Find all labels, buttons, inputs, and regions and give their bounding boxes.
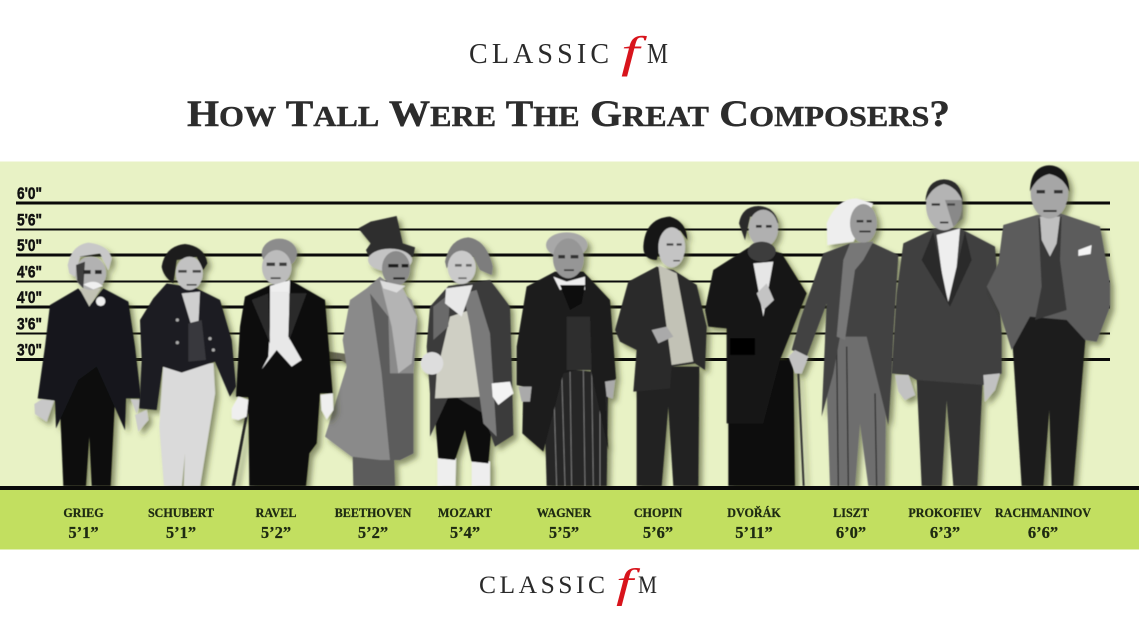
- height scale lines and labels: [16, 184, 1110, 361]
- label: Ravel: RAVEL: [256, 506, 296, 520]
- height scale lines and labels: 4'6": [17, 262, 42, 282]
- logo: Classic FM bottom: M: [638, 570, 657, 599]
- figure: Liszt: [788, 198, 898, 486]
- logo: Classic FM top: f: [621, 29, 648, 77]
- title: HOW TALL WERE THE GREAT COMPOSERS ?: [187, 93, 950, 134]
- label: Schubert: [148, 506, 214, 542]
- label: Ravel: 5’2”: [261, 523, 291, 542]
- label: Wagner: [537, 506, 591, 542]
- label: Wagner: WAGNER: [537, 506, 591, 520]
- label: Prokofiev: PROKOFIEV: [908, 506, 982, 520]
- label: Liszt: 6’0”: [836, 523, 866, 542]
- figure: Grieg: [34, 243, 141, 486]
- label: Liszt: LISZT: [833, 506, 869, 520]
- figure: Wagner: [517, 232, 616, 486]
- label: Mozart: 5’4”: [450, 523, 480, 542]
- figure: Prokofiev: [892, 179, 1002, 486]
- label: Prokofiev: 6’3”: [930, 523, 960, 542]
- height scale lines and labels: 6'0": [17, 184, 42, 203]
- height scale lines and labels: 4'0": [17, 288, 42, 307]
- label: Beethoven: BEETHOVEN: [335, 506, 412, 520]
- label: Grieg: GRIEG: [63, 506, 104, 520]
- height scale lines and labels: 3'0": [17, 340, 42, 360]
- height scale lines and labels: 5'0": [17, 236, 42, 255]
- logo: Classic FM top: [469, 29, 668, 77]
- height scale lines and labels: 3'6": [17, 314, 42, 334]
- label: Mozart: [438, 506, 492, 542]
- figure: Ravel: [232, 239, 333, 486]
- panel: height chart background: [0, 162, 1139, 486]
- composer figures: [34, 165, 1110, 486]
- figure: Schubert: [135, 244, 236, 486]
- logo: Classic FM bottom: [479, 561, 657, 606]
- label: Grieg: [63, 506, 104, 542]
- figure: Mozart: [421, 237, 513, 486]
- label: Rachmaninov: RACHMANINOV: [995, 506, 1091, 520]
- height scale lines and labels: 5'6": [17, 210, 42, 230]
- label: Chopin: 5’6”: [643, 523, 673, 542]
- figure: Chopin: [615, 217, 707, 486]
- label: Mozart: MOZART: [438, 506, 492, 520]
- logo: Classic FM bottom: CLASSIC: [479, 570, 605, 599]
- label: Grieg: 5’1”: [68, 523, 99, 542]
- label: Dvořák: DVOŘÁK: [727, 506, 781, 520]
- label: Schubert: SCHUBERT: [148, 506, 214, 520]
- figure: Rachmaninov: [987, 165, 1110, 486]
- label: Chopin: CHOPIN: [634, 506, 682, 520]
- label: Liszt: [833, 506, 869, 542]
- label: Chopin: [634, 506, 682, 542]
- label: Ravel: [256, 506, 296, 542]
- label: Rachmaninov: [995, 506, 1091, 542]
- figure: Beethoven: [317, 216, 417, 486]
- label: Beethoven: [335, 506, 412, 542]
- label: Wagner: 5’5”: [549, 523, 579, 542]
- label: Rachmaninov: 6’6”: [1028, 523, 1058, 542]
- logo: Classic FM bottom: f: [616, 561, 641, 606]
- label: Prokofiev: [908, 506, 982, 542]
- label: Schubert: 5’1”: [166, 523, 196, 542]
- label: Dvořák: 5’11”: [735, 523, 773, 542]
- panel: name and height band: [0, 490, 1139, 550]
- label: Dvořák: [727, 506, 781, 542]
- logo: Classic FM top: CLASSIC: [469, 39, 609, 70]
- label: Beethoven: 5’2”: [358, 523, 388, 542]
- figure: Dvořák: [705, 206, 807, 486]
- ground line: [0, 486, 1139, 490]
- logo: Classic FM top: M: [647, 39, 668, 70]
